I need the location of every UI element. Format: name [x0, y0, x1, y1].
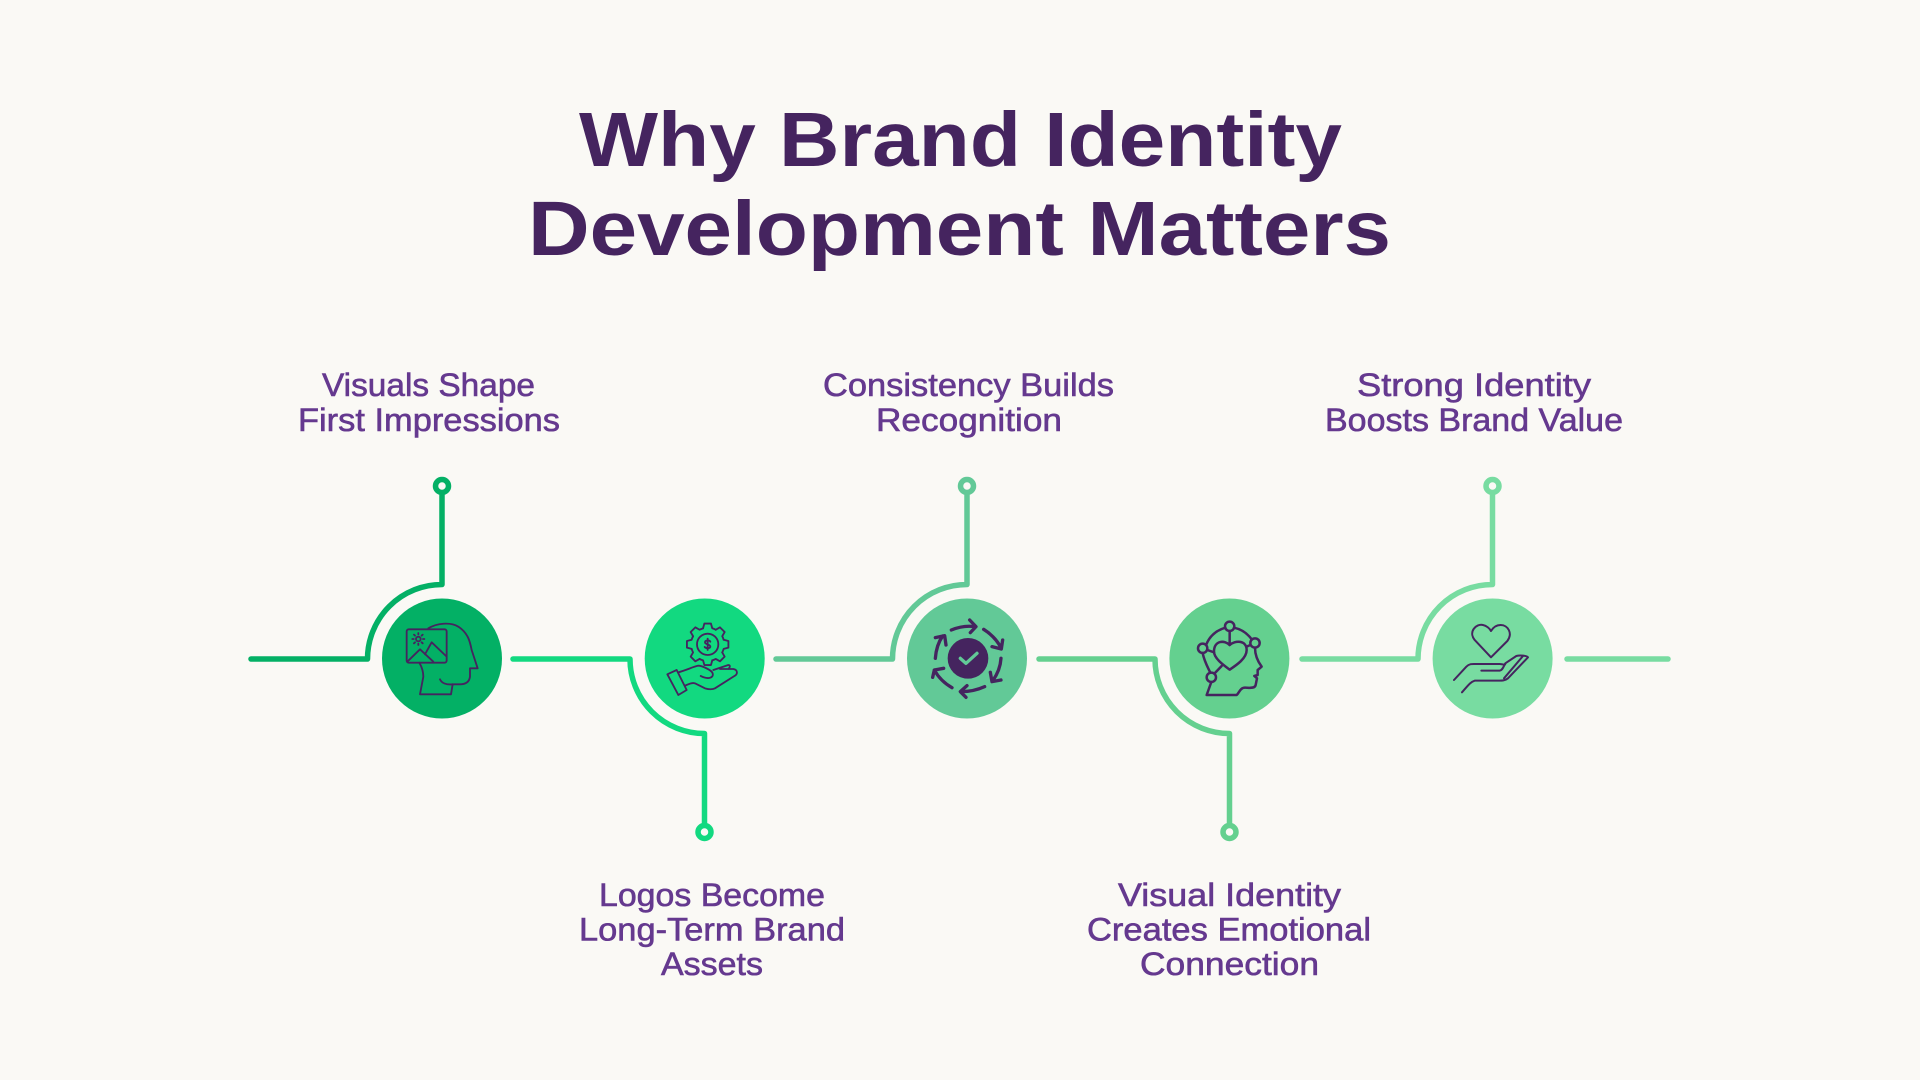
circle: step 1 — [382, 598, 502, 718]
label: step 2 — [579, 877, 845, 982]
connector: step 1 — [251, 480, 448, 659]
step 2: logos become long-term brand assets — [513, 598, 845, 982]
label: step 5: Strong Identity — [1357, 367, 1592, 403]
circle: step 3 — [907, 598, 1027, 718]
label: step 5 — [1325, 367, 1623, 438]
step 4: visual identity creates emotional connection — [1039, 598, 1371, 982]
label: step 1 — [298, 367, 560, 438]
label: step 2: Logos Become — [599, 877, 825, 913]
title: Development Matters — [528, 186, 1391, 272]
label: step 4: Creates Emotional — [1087, 912, 1371, 948]
label: step 1: Visuals Shape — [322, 367, 535, 403]
label: step 5: Boosts Brand Value — [1325, 402, 1623, 438]
connector: step 5 — [1302, 480, 1668, 659]
label: step 3 — [823, 367, 1114, 438]
icon: cycle arrows with check — [933, 620, 1003, 697]
label: step 2: Assets — [661, 946, 763, 982]
label: step 1: First Impressions — [298, 402, 560, 438]
step 5: strong identity boosts brand value — [1302, 367, 1668, 718]
label: step 3: Consistency Builds — [823, 367, 1114, 403]
title — [528, 97, 1391, 272]
icon: head with heart and nodes — [1198, 622, 1262, 695]
label: step 2: Long-Term Brand — [579, 912, 845, 948]
circle: step 4 — [1169, 598, 1289, 718]
connector: step 4 — [1039, 659, 1236, 838]
label: step 4 — [1087, 877, 1371, 982]
circle: step 2 — [645, 598, 765, 718]
connector: step 3 — [776, 480, 974, 659]
label: step 4: Connection — [1140, 946, 1319, 982]
title: Why Brand Identity — [579, 97, 1342, 183]
connector: step 2 — [513, 659, 711, 838]
step 1: visuals shape first impressions — [251, 367, 560, 718]
circle: step 5 — [1433, 598, 1553, 718]
icon: hand holding heart — [1454, 625, 1528, 692]
label: step 3: Recognition — [876, 402, 1062, 438]
icon: hand with gear and dollar — [667, 624, 737, 695]
label: step 4: Visual Identity — [1118, 877, 1342, 913]
step 3: consistency builds recognition — [776, 367, 1114, 718]
icon: head with picture — [407, 624, 478, 694]
